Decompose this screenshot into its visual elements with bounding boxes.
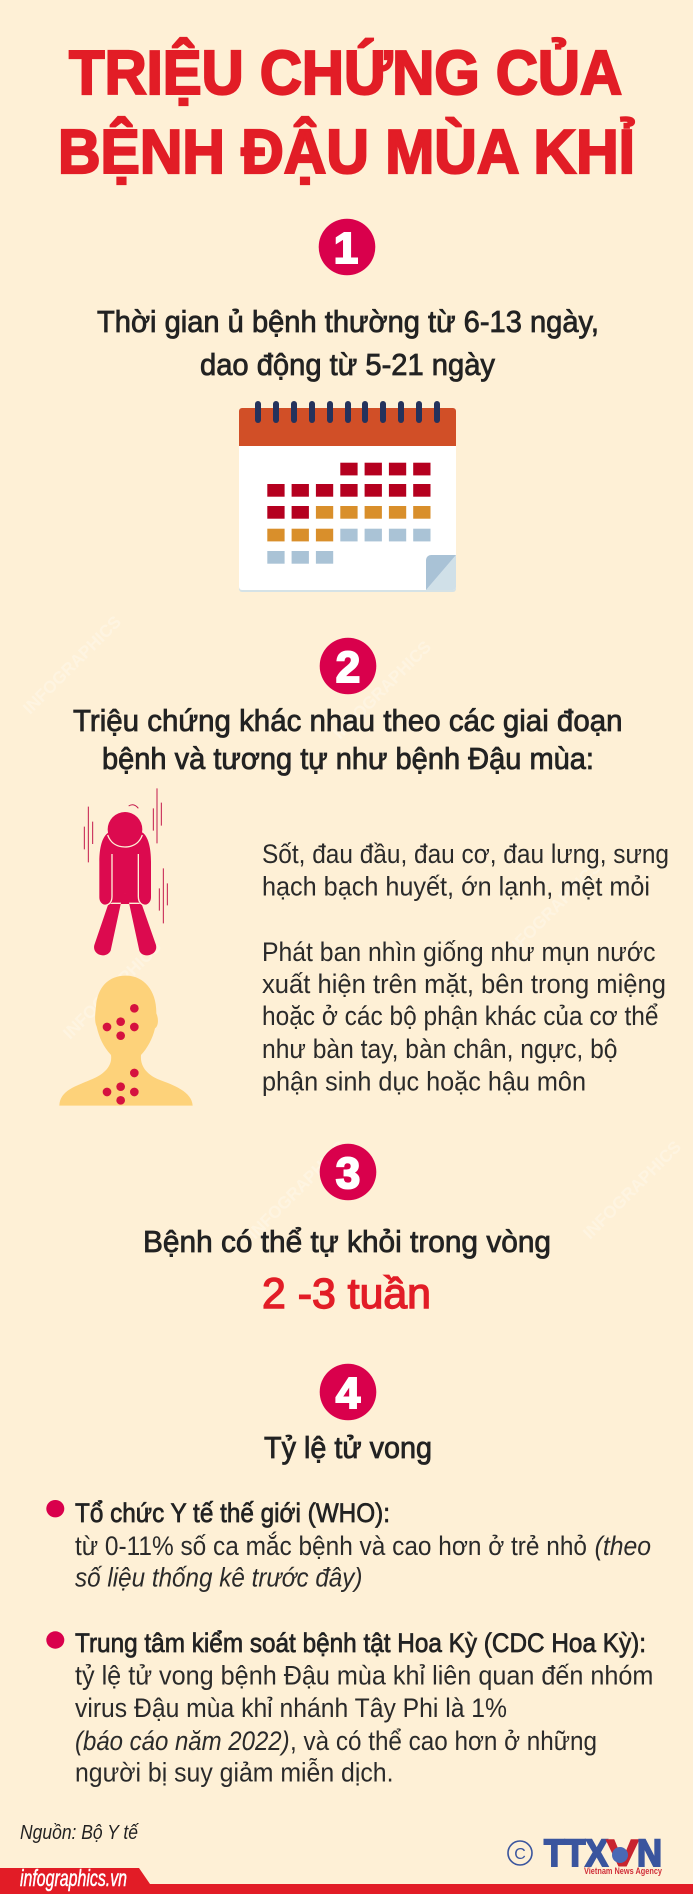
number badge 2: 2	[336, 643, 360, 692]
bullet: CDC: người bị suy giảm miễn dịch.	[75, 1757, 394, 1788]
text: early symptoms: hạch bạch huyết, ớn lạnh, mệt mỏi	[262, 872, 650, 902]
bullet: WHO: (theo	[595, 1531, 651, 1561]
icon: calendar	[239, 401, 456, 592]
bullet: WHO: số liệu thống kê trước đây)	[75, 1563, 362, 1593]
number badge 4: 4	[336, 1369, 361, 1418]
heading: symptoms: Triệu chứng khác nhau theo các giai đoạn	[73, 703, 622, 738]
number badge 1: 1	[334, 224, 358, 273]
bullet: CDC: virus Đậu mùa khỉ nhánh Tây Phi là 1%	[75, 1693, 507, 1723]
number badge 2	[320, 638, 376, 694]
watermarks: INFOGRAPHICS	[499, 857, 605, 963]
number badge 3: 3	[336, 1149, 360, 1198]
text: incubation period	[97, 304, 599, 382]
title: BỆNH ĐẬU MÙA KHỈ	[58, 118, 635, 187]
icon: rash on face and neck	[59, 976, 193, 1106]
text: incubation period: dao động từ 5-21 ngày	[200, 347, 495, 382]
logo: TTXVN: TTX	[544, 1833, 609, 1875]
text: rash description: xuất hiện trên mặt, bên trong miệng	[262, 969, 666, 999]
logo: TTXVN	[508, 1833, 663, 1877]
text: rash description: Phát ban nhìn giống như mụn nước	[262, 937, 656, 967]
footer bar with site tab	[0, 1865, 693, 1894]
watermarks: INFOGRAPHICS	[579, 1137, 685, 1243]
logo: TTXVN: C	[514, 1846, 526, 1863]
source: Nguồn: Bộ Y tế	[20, 1822, 140, 1844]
watermarks: INFOGRAPHICS	[244, 1137, 350, 1243]
highlight: 2-3 weeks: 2 -3 tuần	[262, 1270, 431, 1318]
logo: TTXVN: Vietnam News Agency	[584, 1866, 663, 1877]
bullet: WHO: từ 0-11% số ca mắc bệnh và cao hơn ở trẻ nhỏ	[75, 1530, 587, 1561]
bullet: CDC: Trung tâm kiểm soát bệnh tật Hoa Kỳ (CDC Hoa Kỳ):	[75, 1628, 646, 1658]
watermarks: INFOGRAPHICS	[329, 637, 435, 743]
bullet: WHO: Tổ chức Y tế thế giới (WHO):	[75, 1498, 390, 1528]
text: rash description: phận sinh dục hoặc hậu môn	[262, 1066, 586, 1096]
footer bar with site tab: infographics.vn	[20, 1865, 127, 1891]
title: TRIỆU CHỨNG CỦA	[69, 39, 622, 108]
bullet: CDC: (báo cáo năm 2022)	[75, 1726, 290, 1756]
bullet: CDC	[46, 1628, 653, 1788]
text: incubation period: Thời gian ủ bệnh thường từ 6-13 ngày,	[97, 304, 599, 339]
text: self-limiting: Bệnh có thể tự khỏi trong vòng	[143, 1224, 551, 1259]
watermarks	[19, 612, 685, 1243]
logo: TTXVN: V	[606, 1833, 640, 1875]
number badge 3	[320, 1144, 376, 1200]
number badge 1	[319, 219, 375, 275]
heading: symptoms	[73, 703, 622, 776]
watermarks: INFOGRAPHICS	[19, 612, 125, 718]
bullet: CDC: tỷ lệ tử vong bệnh Đậu mùa khỉ liên quan đến nhóm	[75, 1661, 653, 1691]
title	[58, 39, 635, 187]
watermarks: INFOGRAPHICS	[59, 937, 165, 1043]
text: early symptoms	[262, 839, 669, 902]
logo: TTXVN: N	[637, 1833, 662, 1875]
text: rash description	[262, 937, 666, 1096]
text: rash description: hoặc ở các bộ phận khác của cơ thể	[262, 1001, 658, 1031]
heading: fatality rate: Tỷ lệ tử vong	[264, 1430, 432, 1465]
icon: tired person	[84, 788, 167, 955]
bullet: WHO	[46, 1498, 651, 1593]
number badge 4	[320, 1364, 376, 1420]
bullet: CDC: , và có thể cao hơn ở những	[290, 1726, 597, 1756]
heading: symptoms: bệnh và tương tự như bệnh Đậu mùa:	[102, 741, 594, 776]
text: rash description: như bàn tay, bàn chân, ngực, bộ	[262, 1034, 618, 1064]
